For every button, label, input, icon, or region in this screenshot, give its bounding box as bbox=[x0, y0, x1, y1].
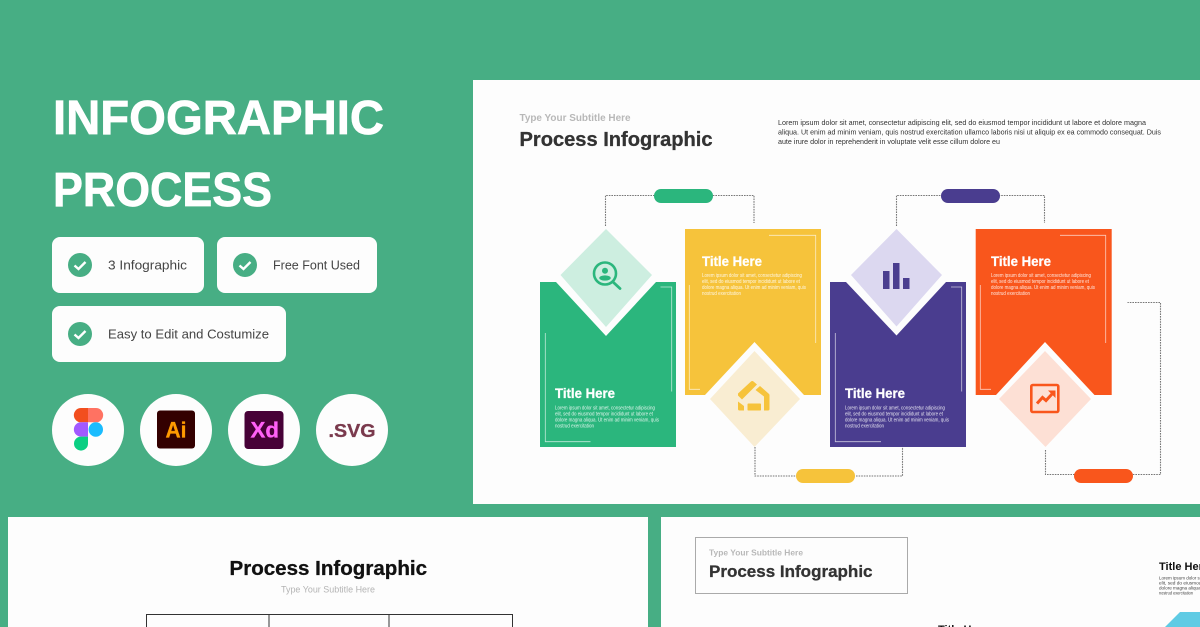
card text: nostrud exercitation bbox=[991, 291, 1030, 297]
subtitle: Type Your Subtitle Here bbox=[520, 112, 631, 124]
table outline bbox=[146, 614, 512, 627]
text block: intro bbox=[778, 118, 1161, 146]
feature chip: Free Font Used: Free Font Used bbox=[273, 258, 360, 272]
card text: dolore magna aliqua. Ut enim ad minim veniam, quis bbox=[991, 285, 1095, 291]
feature chip: Easy to Edit and Costumize bbox=[52, 306, 286, 362]
title box: Process Infographic bbox=[709, 562, 872, 581]
icon: SVG: .SVG bbox=[328, 421, 376, 441]
card title: Title Here bbox=[702, 254, 762, 269]
card text: Lorem ipsum dolor sit amet, consectetur adipiscing bbox=[845, 406, 945, 412]
connector: orange bbox=[1046, 302, 1160, 483]
card title: Title Here bbox=[845, 386, 905, 401]
icon: SVG bbox=[316, 394, 388, 466]
card text bbox=[991, 273, 1095, 297]
title box: Type Your Subtitle Here bbox=[709, 548, 803, 558]
icon diamond: house bbox=[710, 351, 800, 447]
card text: elit, sed do eiusmod tempor incididunt ut labore et bbox=[702, 279, 801, 285]
card title: Title Here bbox=[991, 254, 1051, 269]
feature chip: Free Font Used bbox=[217, 237, 377, 293]
card: orange bbox=[976, 229, 1112, 447]
heading: Process Infographic bbox=[230, 558, 427, 580]
title bbox=[53, 92, 384, 217]
feature chip: Easy to Edit and Costumize: Easy to Edit and Costumize bbox=[108, 326, 269, 342]
feature chip: 3 Infographic: 3 Infographic bbox=[108, 258, 188, 272]
card text bbox=[845, 406, 949, 430]
panel: bottom-right slide preview bbox=[661, 517, 1200, 627]
blue shape bbox=[1165, 612, 1200, 627]
subtitle: Type Your Subtitle Here bbox=[281, 584, 375, 596]
card text: dolore magna aliqua. Ut enim ad minim veniam, quis bbox=[702, 285, 806, 291]
icon diamond: bar chart bbox=[851, 229, 942, 326]
card text: dolore magna aliqua. Ut enim ad minim veniam, quis bbox=[845, 418, 949, 424]
text block: intro: aliqua. Ut enim ad minim veniam, quis nostrud exercitation ullamco laboris nisi ut aliquip ex ea commodo consequat. Duis bbox=[778, 127, 1161, 136]
icon: Adobe XD: Xd bbox=[250, 418, 279, 442]
icon diamond: growth chart bbox=[999, 351, 1091, 447]
card text: top right: nostrud exercitation bbox=[1159, 590, 1193, 596]
connector: yellow bbox=[755, 446, 902, 483]
feature chip: 3 Infographic bbox=[52, 237, 204, 293]
card text: top right bbox=[1159, 576, 1200, 596]
title box bbox=[696, 538, 908, 594]
card: yellow bbox=[685, 229, 821, 447]
card text: elit, sed do eiusmod tempor incididunt ut labore et bbox=[555, 412, 654, 418]
heading: Process Infographic bbox=[520, 129, 712, 151]
card text: elit, sed do eiusmod tempor incididunt ut labore et bbox=[845, 412, 944, 418]
card: purple bbox=[830, 229, 966, 447]
card text bbox=[702, 273, 806, 297]
connector: purple bbox=[896, 189, 1044, 226]
text block: intro: aute irure dolor in reprehenderit in voluptate velit esse cillum dolore eu bbox=[778, 137, 1000, 146]
icon: Figma bbox=[52, 394, 124, 466]
icon: Adobe XD bbox=[228, 394, 300, 466]
card text: dolore magna aliqua. Ut enim ad minim veniam, quis bbox=[555, 418, 659, 424]
card: green bbox=[540, 229, 676, 447]
panel: bottom-left slide preview bbox=[8, 517, 648, 627]
card text bbox=[555, 406, 659, 430]
card text: nostrud exercitation bbox=[845, 424, 884, 430]
card text: elit, sed do eiusmod tempor incididunt ut labore et bbox=[991, 279, 1090, 285]
card text: Lorem ipsum dolor sit amet, consectetur adipiscing bbox=[702, 273, 802, 279]
card text: Lorem ipsum dolor sit amet, consectetur adipiscing bbox=[555, 406, 655, 412]
title: INFOGRAPHIC bbox=[53, 92, 384, 145]
card text: nostrud exercitation bbox=[555, 424, 594, 430]
card text: nostrud exercitation bbox=[702, 291, 741, 297]
icon: Adobe Illustrator bbox=[140, 394, 212, 466]
title: PROCESS bbox=[53, 164, 272, 217]
card title: Title Here bbox=[555, 386, 615, 401]
icon: Adobe Illustrator: Ai bbox=[166, 418, 186, 442]
connector: green bbox=[606, 189, 754, 226]
panel: main process slide bbox=[473, 80, 1200, 504]
icon diamond: search bbox=[560, 229, 652, 327]
card text: Lorem ipsum dolor sit amet, consectetur adipiscing bbox=[991, 273, 1091, 279]
text block: intro: Lorem ipsum dolor sit amet, consectetur adipiscing elit, sed do eiusmod tempor incididunt ut labore et dolore magna bbox=[778, 118, 1146, 127]
